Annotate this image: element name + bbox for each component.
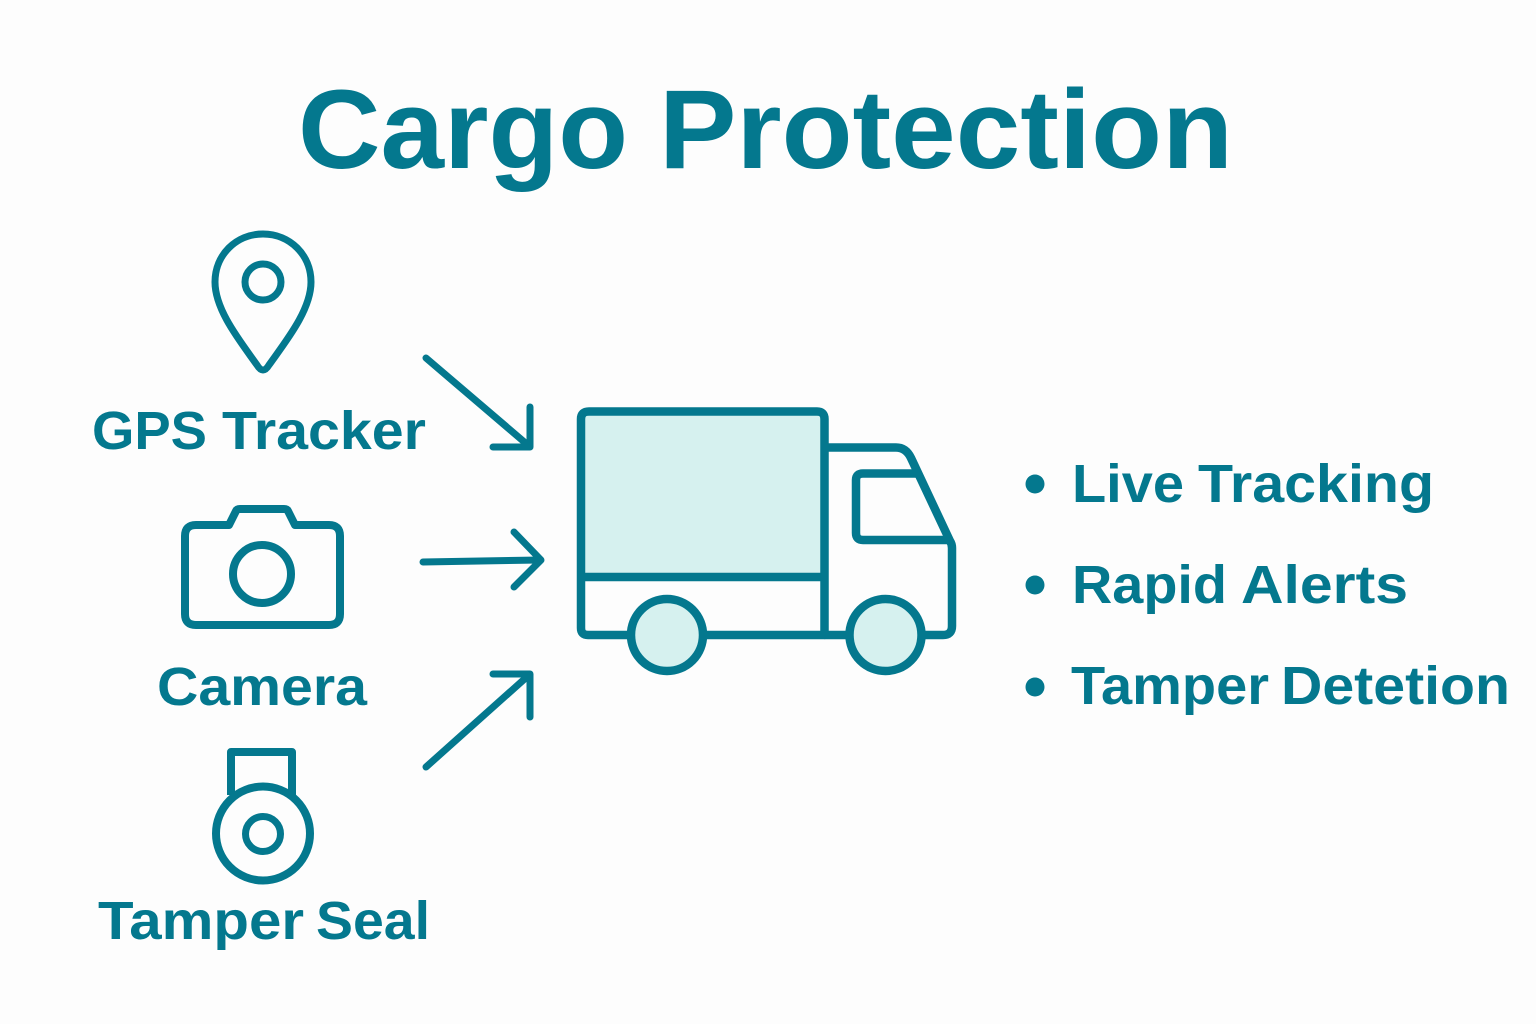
icon: GPS pin <box>215 234 311 370</box>
label: Camera: Camera <box>157 657 368 717</box>
item: Live Tracking <box>1026 454 1434 514</box>
label: GPS Tracker: GPS <box>92 401 207 461</box>
item: Rapid Alerts: Rapid <box>1072 555 1227 615</box>
cargo floor line <box>581 573 824 581</box>
icon: tamper seal <box>216 752 310 880</box>
item: Rapid Alerts <box>1026 555 1408 615</box>
icon: camera <box>185 509 340 625</box>
item: Tamper Detetion: Tamper <box>1071 656 1269 716</box>
arrow: GPS to truck <box>426 358 530 447</box>
item: Live Tracking: Live <box>1072 454 1184 514</box>
bullet list <box>1026 454 1510 716</box>
item: Live Tracking: Tracking <box>1198 454 1434 514</box>
label: Tamper Seal: Seal <box>316 891 430 951</box>
arrow: seal to truck <box>426 674 530 767</box>
label: GPS Tracker: Tracker <box>222 401 426 461</box>
wheel left <box>631 599 703 671</box>
cargo box fill <box>581 411 825 577</box>
wheel right <box>850 599 922 671</box>
arrow: camera to truck <box>423 532 541 587</box>
icon: truck <box>581 411 952 671</box>
item: Rapid Alerts: Alerts <box>1241 555 1408 615</box>
cab window <box>856 474 950 540</box>
title: Cargo <box>298 67 628 192</box>
item: Tamper Detetion <box>1026 656 1510 716</box>
label: Tamper Seal: Tamper <box>98 891 304 951</box>
item: Tamper Detetion: Detetion <box>1281 656 1510 716</box>
title: Protection <box>659 67 1233 192</box>
cab outline <box>824 448 952 635</box>
cargo box outline <box>581 412 824 635</box>
